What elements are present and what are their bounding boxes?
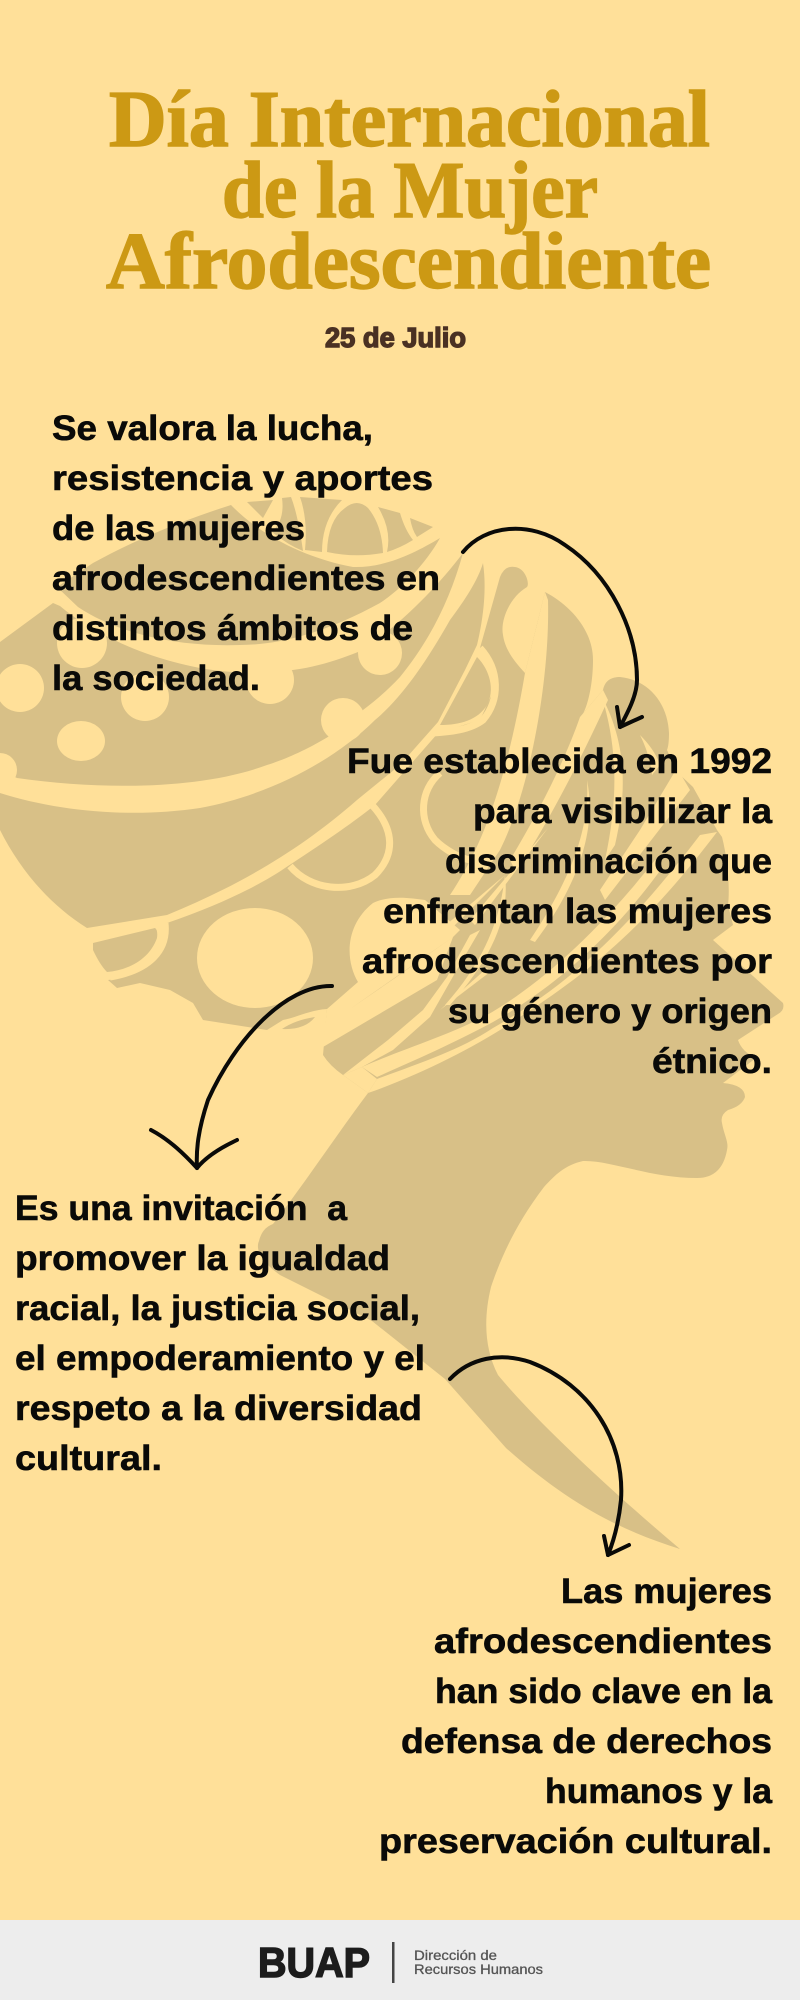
small eye-shaped mark [282, 1017, 315, 1029]
text block: 1992: para visibilizar la [473, 792, 773, 831]
title: Día Internacional [109, 76, 710, 164]
text block: 1992: su género y origen [448, 992, 772, 1031]
text block: invitación [15, 1189, 425, 1478]
BUAP logo: BUAP [258, 1939, 370, 1986]
footer bar [0, 1920, 800, 2000]
text block: lucha y aportes: Se valora la lucha, [52, 409, 373, 448]
text block: lucha y aportes [52, 409, 440, 698]
text block: invitación: Es una invitación a [15, 1189, 348, 1228]
department name [414, 1947, 543, 1977]
text block: 1992: étnico. [652, 1042, 772, 1081]
arrow: invitación to defensa [450, 1357, 629, 1555]
text block: 1992: Fue establecida en 1992 [347, 742, 772, 781]
text block: 1992: discriminación que [445, 842, 772, 881]
title [106, 76, 711, 306]
text block: defensa de derechos: humanos y la [545, 1772, 773, 1811]
text block: lucha y aportes: afrodescendientes en [52, 559, 440, 598]
date: 25 de Julio [325, 322, 466, 353]
text block: invitación: cultural. [15, 1439, 162, 1478]
title: de la Mujer [222, 147, 598, 235]
text block: invitación: racial, la justicia social, [15, 1289, 420, 1328]
department name: Recursos Humanos [414, 1961, 543, 1977]
leaf on wrap [440, 657, 491, 725]
thin hair wedge [350, 937, 453, 1009]
text block: 1992: afrodescendientes por [362, 942, 772, 981]
text block: lucha y aportes: de las mujeres [52, 509, 305, 548]
text block: lucha y aportes: resistencia y aportes [52, 459, 433, 498]
head, hair, face and neck [108, 567, 783, 1549]
arrow: 1992 to invitación [151, 986, 332, 1168]
department name: Dirección de [414, 1947, 497, 1963]
headwrap middle band with dots [0, 553, 463, 786]
silhouette: woman with headwrap [0, 497, 783, 1549]
text block: defensa de derechos: Las mujeres [561, 1572, 772, 1611]
text block: 1992: enfrentan las mujeres [383, 892, 772, 931]
divider [392, 1942, 394, 1983]
text block: invitación: el empoderamiento y el [15, 1339, 425, 1378]
cut-outs in hair and wrap [197, 592, 717, 1093]
text block: defensa de derechos: defensa de derechos [401, 1722, 772, 1761]
wrap dots [0, 618, 402, 787]
text block: invitación: promover la igualdad [15, 1239, 390, 1278]
text block: 1992 [347, 742, 773, 1081]
text block: defensa de derechos: preservación cultural. [379, 1822, 772, 1861]
headwrap top pieces [57, 497, 440, 645]
small wrap piece [93, 928, 157, 972]
text block: defensa de derechos: afrodescendientes [434, 1622, 772, 1661]
title: Afrodescendiente [106, 218, 711, 306]
text block: invitación: respeto a la diversidad [15, 1389, 422, 1428]
ring strokes [110, 648, 495, 977]
text block: defensa de derechos [379, 1572, 773, 1861]
text block: lucha y aportes: la sociedad. [52, 659, 260, 698]
headwrap lower band [0, 563, 485, 928]
arrow: lucha to 1992 [463, 529, 642, 727]
text block: defensa de derechos: han sido clave en la [435, 1672, 773, 1711]
text block: lucha y aportes: distintos ámbitos de [52, 609, 413, 648]
